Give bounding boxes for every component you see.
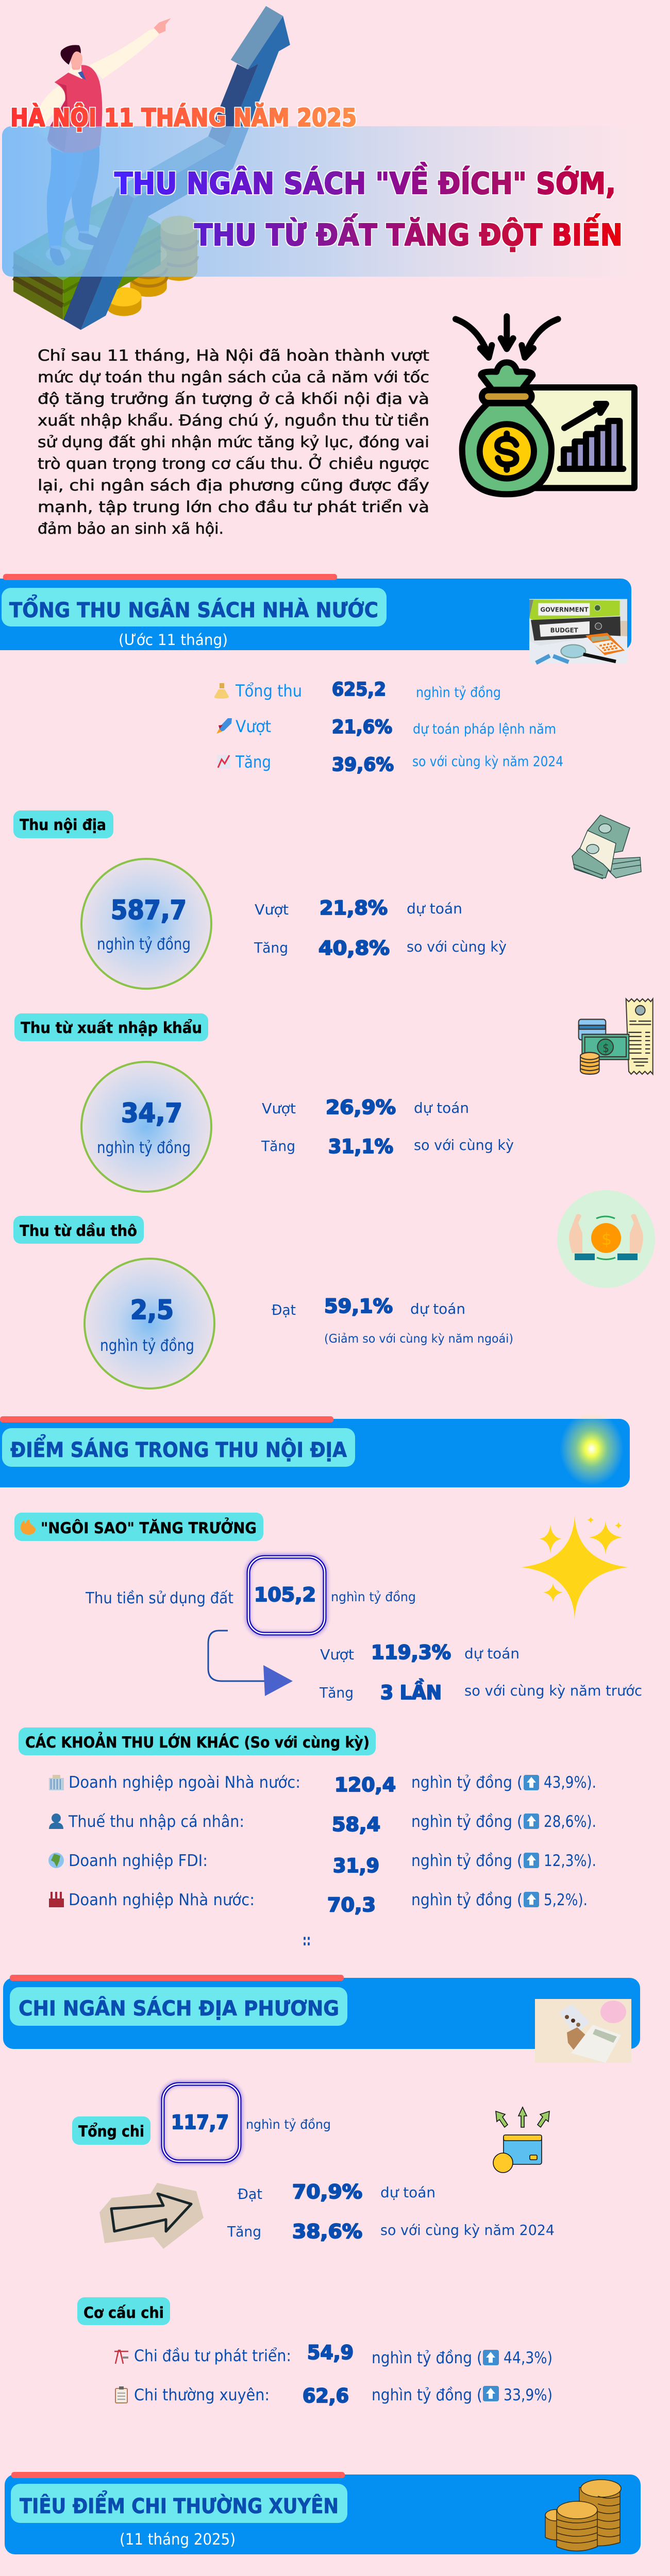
- icon: cash stacks: [572, 815, 641, 879]
- panel: ngôi sao tăng trưởng: [14, 1513, 642, 1704]
- panel: thu từ dầu thô: [13, 1190, 655, 1388]
- section header: Chi ngân sách địa phương: [3, 1975, 640, 2063]
- panel: ngôi sao tăng trưởng: Thu tiền sử dụng đất: [85, 1589, 233, 1607]
- connector arrow: [208, 1631, 293, 1696]
- stats: so với cùng kỳ: [407, 938, 507, 955]
- icon: hands holding coin: [557, 1190, 655, 1288]
- panel: cơ cấu chi: [77, 2297, 552, 2407]
- row: thuế thu nhập cá nhân: 58,4: [332, 1814, 380, 1836]
- section header: Tiêu điểm chi thường xuyên: [5, 2472, 641, 2554]
- stats: 40,8%: [319, 937, 390, 959]
- row: thuế thu nhập cá nhân: 28,6%).: [544, 1812, 596, 1831]
- stats: Tăng: [254, 939, 288, 956]
- photo: budget binders: [529, 599, 627, 664]
- panel: tổng chi: Tổng chi: [78, 2123, 144, 2140]
- stats: Vượt: [262, 1100, 296, 1117]
- summary rows: Tổng thu: [235, 681, 302, 701]
- icon: rocket: [216, 718, 232, 734]
- stats: [254, 897, 507, 959]
- stats: Vượt: [320, 1646, 354, 1663]
- row: chi thường xuyên: 62,6: [303, 2385, 349, 2407]
- stats: dự toán: [464, 1645, 520, 1662]
- row: chi thường xuyên: Chi thường xuyên:: [134, 2386, 270, 2404]
- intro paragraph: xuất nhập khẩu. Đáng chú ý, nguồn thu từ tiền: [38, 412, 429, 429]
- row: doanh nghiệp nhà nước: 5,2%).: [544, 1891, 588, 1909]
- stats: 38,6%: [292, 2221, 362, 2243]
- neon box: 117,7: 117,7: [171, 2111, 229, 2133]
- hero illustration: man pointing at rising arrow: [13, 6, 290, 330]
- row: doanh nghiệp nhà nước: 70,3: [327, 1894, 376, 1916]
- icon: card, banknote, receipt and coins: $: [602, 1042, 609, 1055]
- icon: coin stacks: [545, 2480, 621, 2551]
- title line 2: THU TỪ ĐẤT TĂNG ĐỘT BIẾN: [194, 213, 623, 252]
- title line 1: THU NGÂN SÁCH "VỀ ĐÍCH" SỚM,: [114, 161, 616, 201]
- panel: thu nội địa: Thu nội địa: [20, 816, 106, 834]
- section header: Tổng thu ngân sách nhà nước: [0, 574, 631, 664]
- stats: [261, 1096, 514, 1158]
- row: doanh nghiệp FDI: [48, 1852, 596, 1877]
- stats: 26,9%: [326, 1096, 396, 1118]
- summary rows: 39,6%: [332, 754, 394, 775]
- circle: 587,7: nghìn tỷ đồng: [97, 935, 191, 954]
- panel: thu từ xuất nhập khẩu: [14, 999, 653, 1192]
- panel: thu nội địa: [13, 810, 641, 989]
- circle: 34,7: 34,7: [121, 1098, 182, 1129]
- summary rows: Vượt: [236, 717, 271, 736]
- row: thuế thu nhập cá nhân: nghìn tỷ đồng (: [411, 1812, 523, 1831]
- row: thuế thu nhập cá nhân: [49, 1812, 596, 1836]
- icon: hands holding coin: $: [601, 1229, 612, 1249]
- panel: ngôi sao tăng trưởng: "NGÔI SAO" TĂNG TRƯỞNG: [41, 1517, 257, 1537]
- title: Hà Nội 11 tháng năm 2025: HÀ NỘI 11 THÁNG NĂM 2025: [10, 103, 357, 132]
- stats: Đạt: [272, 1301, 296, 1318]
- section header: Điểm sáng trong thu nội địa: [0, 1412, 630, 1487]
- panel: tổng chi: nghìn tỷ đồng: [246, 2117, 331, 2132]
- section header: Tổng thu ngân sách nhà nước: TỔNG THU NGÂN SÁCH NHÀ NƯỚC: [9, 594, 378, 622]
- summary rows: [214, 679, 563, 775]
- icon: money bag: [214, 683, 229, 699]
- stats: so với cùng kỳ: [414, 1137, 514, 1154]
- stats: 3 LẦN: [380, 1679, 442, 1704]
- summary rows: 625,2: [332, 679, 386, 700]
- icon: chart up: [217, 755, 230, 769]
- icon: wallet with arrows: [493, 2107, 549, 2173]
- neon box: 117,7: [162, 2083, 240, 2162]
- stats: Tăng: [319, 1684, 354, 1701]
- row: doanh nghiệp FDI: 31,9: [333, 1855, 379, 1877]
- neon box: 105,2: 105,2: [254, 1584, 316, 1606]
- title band: [2, 126, 644, 277]
- panel: cơ cấu chi: Cơ cấu chi: [83, 2304, 164, 2321]
- row: doanh nghiệp nhà nước: Doanh nghiệp Nhà nước:: [69, 1891, 255, 1909]
- section header: Tiêu điểm chi thường xuyên: (11 tháng 2025): [120, 2531, 236, 2549]
- photo: calculator and piggy bank: [535, 1999, 631, 2063]
- stats: so với cùng kỳ năm trước: [464, 1682, 642, 1699]
- neon box: 105,2: [248, 1556, 325, 1634]
- row: chi thường xuyên: nghìn tỷ đồng (: [372, 2386, 482, 2404]
- row: doanh nghiệp nhà nước: [49, 1891, 588, 1916]
- icon: sparkles: [521, 1515, 628, 1620]
- panel: ngôi sao tăng trưởng: nghìn tỷ đồng: [331, 1589, 416, 1604]
- row: doanh nghiệp ngoài nhà nước: 120,4: [334, 1774, 396, 1796]
- summary rows: Tăng: [235, 752, 271, 772]
- stats: so với cùng kỳ năm 2024: [380, 2222, 555, 2239]
- summary rows: 21,6%: [332, 717, 392, 738]
- summary rows: so với cùng kỳ năm 2024: [412, 754, 563, 770]
- stats: Vượt: [255, 901, 289, 918]
- rising arrow: [63, 6, 290, 330]
- row: chi đầu tư phát triển: Chi đầu tư phát triển:: [134, 2347, 291, 2365]
- panel: tổng chi: [72, 2083, 555, 2249]
- circle: 34,7: nghìn tỷ đồng: [97, 1139, 191, 1157]
- stats: Tăng: [227, 2223, 261, 2240]
- row: doanh nghiệp ngoài nhà nước: 43,9%).: [544, 1773, 596, 1792]
- section header: Điểm sáng trong thu nội địa: ĐIỂM SÁNG TRONG THU NỘI ĐỊA: [10, 1434, 347, 1462]
- circle: 587,7: 587,7: [111, 895, 187, 926]
- photo: budget binders: BUDGET: [550, 626, 578, 634]
- stats: dự toán: [380, 2184, 435, 2201]
- intro paragraph: sử dụng đất ghi nhận mức tăng kỷ lục, đóng vai: [38, 433, 429, 451]
- summary rows: nghìn tỷ đồng: [416, 685, 501, 701]
- stats: dự toán: [407, 900, 462, 917]
- stats: [319, 1641, 642, 1704]
- icon: torn paper arrow: [99, 2183, 204, 2249]
- intro paragraph: lại, chi ngân sách địa phương cũng được đẩy: [38, 477, 429, 494]
- icon: money bag and growth chart: [456, 316, 634, 494]
- section header: Tiêu điểm chi thường xuyên: TIÊU ĐIỂM CHI THƯỜNG XUYÊN: [20, 2490, 339, 2518]
- panel: các khoản thu lớn khác: [19, 1727, 596, 1950]
- row: chi đầu tư phát triển: 44,3%): [504, 2349, 552, 2367]
- panel: các khoản thu lớn khác: CÁC KHOẢN THU LỚN KHÁC (So với cùng kỳ): [25, 1732, 370, 1751]
- intro paragraph: mạnh, tập trung lớn cho đầu tư phát triển và: [38, 498, 429, 516]
- row: doanh nghiệp ngoài nhà nước: Doanh nghiệp ngoài Nhà nước:: [69, 1773, 300, 1792]
- panel: thu từ xuất nhập khẩu: Thu từ xuất nhập khẩu: [21, 1019, 202, 1037]
- stats: dự toán: [410, 1300, 465, 1317]
- icon: flame: [21, 1520, 36, 1535]
- stats: 31,1%: [328, 1136, 393, 1158]
- stats: 119,3%: [371, 1641, 451, 1664]
- section header: Chi ngân sách địa phương: CHI NGÂN SÁCH ĐỊA PHƯƠNG: [19, 1996, 339, 2021]
- icon: card, banknote, receipt and coins: [579, 999, 653, 1074]
- stats: 21,8%: [320, 897, 388, 919]
- row: doanh nghiệp FDI: nghìn tỷ đồng (: [411, 1852, 523, 1870]
- row: chi đầu tư phát triển: [114, 2342, 552, 2367]
- intro paragraph: độ tăng trưởng ấn tượng ở cả khối nội địa và: [38, 390, 429, 408]
- row: doanh nghiệp ngoài nhà nước: [49, 1773, 596, 1796]
- man: [30, 18, 171, 266]
- separator marks: ::: [303, 1931, 311, 1950]
- stats: Đạt: [238, 2185, 262, 2202]
- row: chi đầu tư phát triển: nghìn tỷ đồng (: [372, 2349, 482, 2367]
- intro paragraph: Chỉ sau 11 tháng, Hà Nội đã hoàn thành vượt: [38, 347, 429, 364]
- circle: 2,5: 2,5: [130, 1295, 174, 1326]
- coin stacks: [106, 216, 197, 316]
- circle: 2,5: nghìn tỷ đồng: [100, 1336, 194, 1355]
- row: thuế thu nhập cá nhân: Thuế thu nhập cá nhân:: [68, 1812, 244, 1831]
- intro paragraph: mức dự toán thu ngân sách của cả năm với tốc: [38, 368, 429, 386]
- intro paragraph: trò quan trọng trong cơ cấu thu. Ở chiều ngược: [38, 454, 429, 472]
- row: doanh nghiệp ngoài nhà nước: nghìn tỷ đồng (: [411, 1773, 523, 1792]
- icon: glow: [560, 1412, 624, 1486]
- panel: thu từ dầu thô: Thu từ dầu thô: [20, 1222, 137, 1240]
- stats: 59,1%: [324, 1295, 393, 1317]
- stats: Tăng: [261, 1138, 295, 1155]
- stats: [272, 1295, 513, 1346]
- row: doanh nghiệp nhà nước: nghìn tỷ đồng (: [411, 1891, 523, 1909]
- row: chi thường xuyên: 33,9%): [504, 2386, 552, 2404]
- circle: 2,5: [85, 1259, 214, 1388]
- stats: (Giảm so với cùng kỳ năm ngoái): [324, 1332, 513, 1346]
- row: chi thường xuyên: [115, 2385, 552, 2407]
- row: chi đầu tư phát triển: 54,9: [307, 2342, 354, 2364]
- section header: Tổng thu ngân sách nhà nước: (Ước 11 tháng): [119, 631, 228, 649]
- stats: dự toán: [414, 1099, 469, 1116]
- stats: 70,9%: [292, 2181, 362, 2203]
- row: doanh nghiệp FDI: 12,3%).: [544, 1852, 596, 1870]
- photo: budget binders: GOVERNMENT: [540, 606, 589, 614]
- summary rows: dự toán pháp lệnh năm: [413, 721, 556, 737]
- circle: 34,7: [81, 1062, 211, 1192]
- intro paragraph: đảm bảo an sinh xã hội.: [38, 520, 224, 537]
- row: doanh nghiệp FDI: Doanh nghiệp FDI:: [69, 1852, 208, 1870]
- circle: 587,7: [81, 859, 211, 989]
- stats: [227, 2181, 555, 2243]
- money stack: [13, 196, 161, 320]
- intro paragraph: [38, 347, 429, 537]
